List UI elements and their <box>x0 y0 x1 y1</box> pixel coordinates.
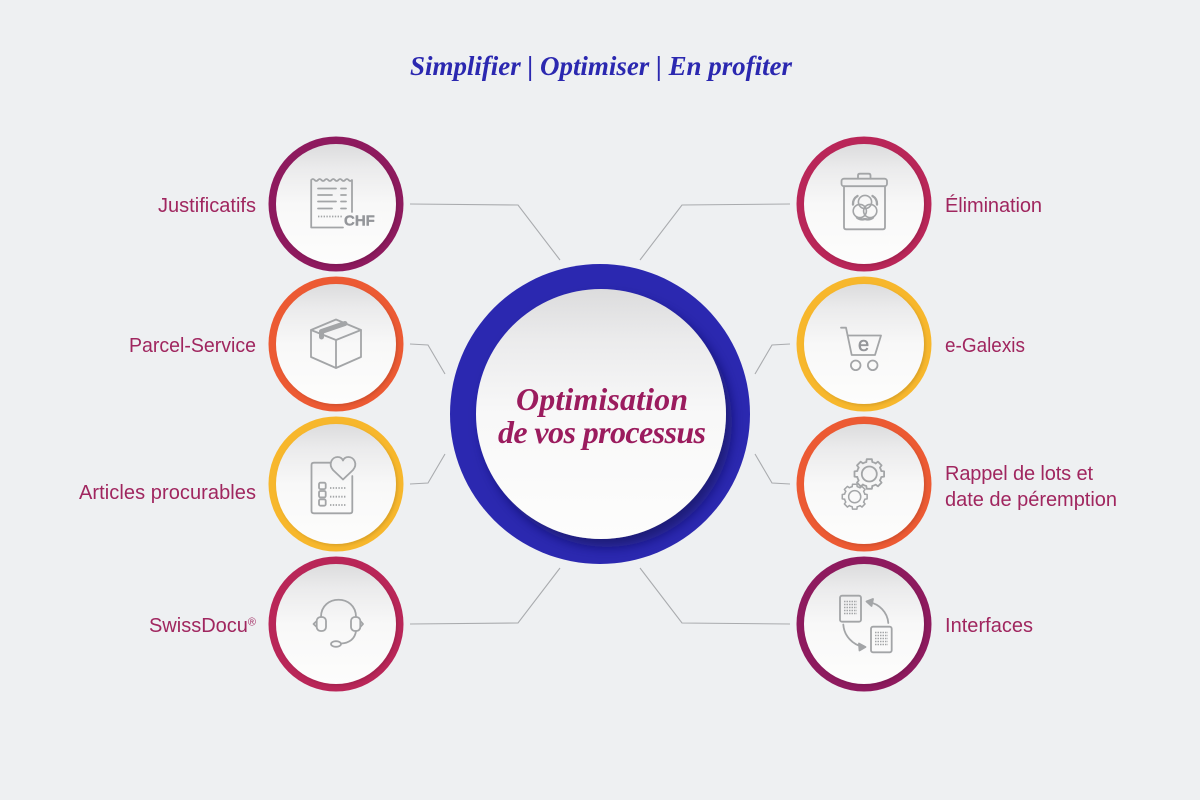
icon: exchange arrows <box>840 596 892 652</box>
icon: shopping cart <box>841 328 881 370</box>
title: Simplifier | Optimiser | En profiter <box>410 51 792 81</box>
connector lines <box>410 204 790 624</box>
icon: gears <box>842 459 884 509</box>
item: Interfaces <box>796 556 1033 692</box>
icon: biohazard bin <box>842 174 887 229</box>
icon: checklist with heart <box>312 457 355 513</box>
label: Interfaces <box>945 615 1033 637</box>
label: Parcel-Service <box>129 335 256 357</box>
item: e-Galexis <box>796 276 1025 412</box>
label: ® <box>248 616 256 628</box>
icon: shopping cart: e <box>858 334 869 356</box>
icon: receipt CHF: CHF <box>344 212 375 230</box>
label: date de péremption <box>945 489 1117 511</box>
item: Parcel-Service <box>129 276 404 412</box>
item: Articles procurables <box>79 416 404 552</box>
hub label <box>498 381 706 450</box>
item: Rappel de lots <box>796 416 1117 552</box>
label: SwissDocu <box>149 615 248 637</box>
item: Justificatifs <box>158 136 404 272</box>
central hub <box>450 264 750 564</box>
icon: headset <box>314 600 363 647</box>
item: Élimination <box>796 136 1042 272</box>
label: Justificatifs <box>158 195 256 217</box>
label: e-Galexis <box>945 335 1025 357</box>
label: Articles procurables <box>79 482 256 504</box>
label: Rappel de lots et <box>945 463 1093 485</box>
item: SwissDocu <box>149 556 404 692</box>
icon: parcel box <box>311 320 361 368</box>
label: Élimination <box>945 194 1042 217</box>
hub label: de vos processus <box>498 414 706 450</box>
hub label: Optimisation <box>516 381 688 417</box>
label <box>945 463 1117 511</box>
icon: receipt CHF <box>311 179 375 230</box>
